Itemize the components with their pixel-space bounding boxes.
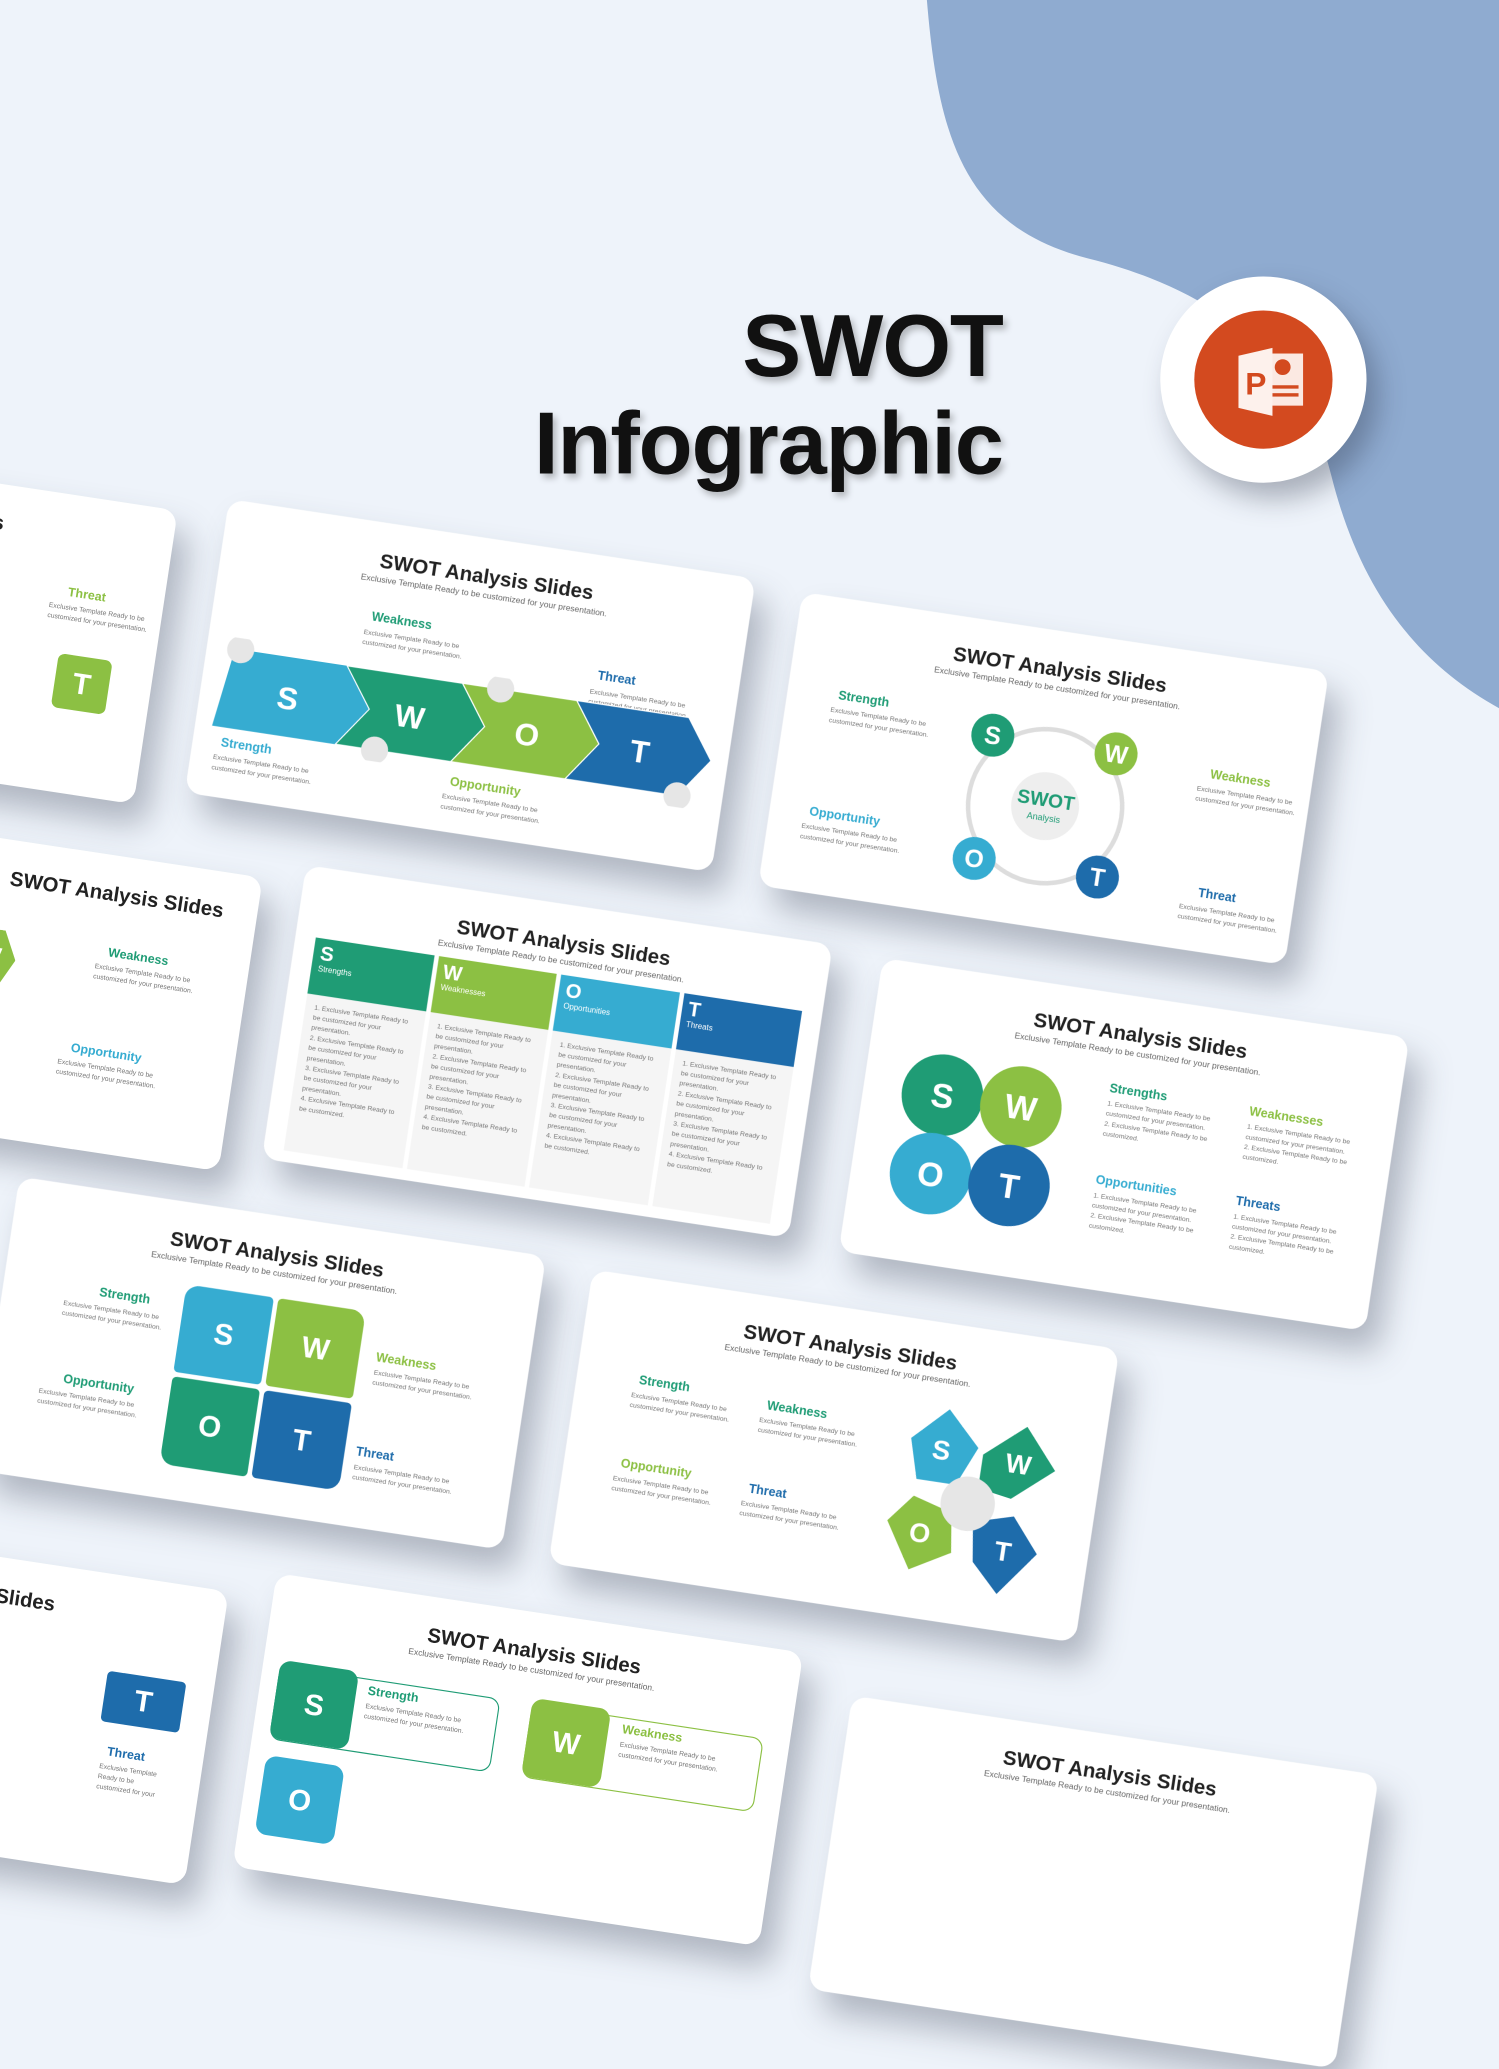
card: cycle: Threat xyxy=(1197,887,1237,906)
chevron row: S xyxy=(274,679,301,718)
card: chevrons: Strength xyxy=(220,736,273,757)
card: circles: T xyxy=(996,1167,1022,1207)
card: diamonds: O xyxy=(907,1516,933,1550)
card: table: 1. Exclusive Template Ready to be customized for your presentation. xyxy=(679,1061,777,1093)
card: chevrons: Exclusive Template Ready to be customized for your presentation. xyxy=(362,629,462,661)
card: table: 1. Exclusive Template Ready to be customized for your presentation. xyxy=(433,1023,531,1056)
card: cycle: Analysis xyxy=(1026,810,1061,825)
card: diamonds: Exclusive Template Ready to be customized for your presentation. xyxy=(739,1500,839,1532)
card: circles: Strengths xyxy=(1109,1082,1168,1104)
card: squares: O xyxy=(196,1407,224,1444)
card: diamonds: W xyxy=(1003,1447,1034,1481)
card: circles: 2. Exclusive Template Ready to be customized. xyxy=(1088,1213,1194,1235)
card: cycle xyxy=(758,592,1329,965)
card: left partial middle: Exclusive Template Ready to be customized for your presentation. xyxy=(55,1059,156,1091)
card: bottom middle xyxy=(232,1573,803,1946)
card: diamonds xyxy=(548,1269,1119,1643)
card: diamonds: Exclusive Template Ready to be customized for your presentation. xyxy=(611,1475,711,1507)
card: squares: Exclusive Template Ready to be customized for your presentation. xyxy=(372,1370,472,1402)
card: squares: Threat xyxy=(355,1445,395,1464)
card: diamonds: S xyxy=(930,1433,953,1467)
card: table: 3. Exclusive Template Ready to be customized for your presentation. xyxy=(547,1103,645,1135)
card: cycle: Exclusive Template Ready to be customized for your presentation. xyxy=(1195,786,1295,817)
card: table: Strengths xyxy=(317,965,352,978)
card: diamonds: Exclusive Template Ready to be customized for your presentation. xyxy=(724,1342,971,1389)
card: chevrons: Threat xyxy=(597,669,636,689)
card: table: 3. Exclusive Template Ready to be customized for your presentation. xyxy=(670,1121,767,1154)
card: left partial top xyxy=(0,431,178,804)
card: bottom middle: Exclusive Template Ready to be customized for your presentation. xyxy=(618,1742,718,1774)
card: table: 1. Exclusive Template Ready to be customized for your presentation. xyxy=(556,1042,654,1075)
card: squares: Exclusive Template Ready to be customized for your presentation. xyxy=(352,1464,452,1496)
card: circles: SWOT Analysis Slides xyxy=(1032,1008,1249,1063)
card: squares: Exclusive Template Ready to be customized for your presentation. xyxy=(61,1300,162,1332)
chevron row: O xyxy=(512,715,542,754)
card: squares: SWOT Analysis Slides xyxy=(169,1227,385,1282)
card: cycle: SWOT xyxy=(1016,786,1076,815)
card: left partial middle: Opportunity xyxy=(70,1041,142,1065)
card: bottom middle: Strength xyxy=(367,1684,419,1706)
card: squares: Strength xyxy=(98,1286,151,1307)
card: diamonds: T xyxy=(992,1534,1014,1568)
card: table: S xyxy=(319,942,336,966)
card: chevrons: Exclusive Template Ready to be customized for your presentation. xyxy=(440,794,540,825)
title xyxy=(534,296,1331,500)
card: table: 2. Exclusive Template Ready to be customized for your presentation. xyxy=(674,1091,772,1124)
card: table xyxy=(262,865,833,1238)
card: table: 3. Exclusive Template Ready to be customized for your presentation. xyxy=(424,1084,522,1117)
card: table: 2. Exclusive Template Ready to be customized for your presentation. xyxy=(429,1054,527,1086)
card: table: Opportunities xyxy=(563,1002,611,1017)
card: table: Weaknesses xyxy=(440,984,486,999)
card: bottom left partial: Exclusive Template Ready to be customized for your xyxy=(96,1763,157,1799)
card: cycle: T xyxy=(1088,863,1107,893)
card: table: Exclusive Template Ready to be customized for your presentation. xyxy=(437,938,685,985)
card: bottom middle: SWOT Analysis Slides xyxy=(426,1624,643,1678)
card: left partial top: Exclusive Template Ready to be customized for your presentation. xyxy=(47,602,147,634)
card: diamonds: Exclusive Template Ready to be customized for your presentation. xyxy=(757,1417,857,1449)
card: table: 2. Exclusive Template Ready to be customized for your presentation. xyxy=(306,1035,404,1068)
card: left partial middle: Exclusive Template Ready to be customized for your presentation. xyxy=(93,964,193,995)
title: Infographic xyxy=(534,393,1003,493)
card: table: 3. Exclusive Template Ready to be customized for your presentation. xyxy=(302,1065,399,1098)
card: circles: 1. Exclusive Template Ready to be customized for your presentation. xyxy=(1105,1101,1211,1133)
card: bottom middle: S xyxy=(302,1686,326,1723)
card: bottom middle: Weakness xyxy=(621,1723,683,1745)
card: left partial middle: Weakness xyxy=(107,946,169,969)
card: left partial middle: SWOT Analysis Slides xyxy=(8,867,225,922)
card: bottom middle: O xyxy=(286,1781,314,1818)
card: circles: S xyxy=(928,1076,956,1117)
card: chevrons: Exclusive Template Ready to be customized for your presentation. xyxy=(588,689,688,721)
card: table: Threats xyxy=(685,1021,713,1033)
card: squares: Weakness xyxy=(375,1351,437,1373)
card: squares: Opportunity xyxy=(62,1372,135,1397)
card: table: 4. Exclusive Template Ready to be customized. xyxy=(544,1133,640,1156)
card: squares: Exclusive Template Ready to be customized for your presentation. xyxy=(150,1249,398,1297)
chevron row: W xyxy=(392,697,427,737)
card: diamonds: Exclusive Template Ready to be customized for your presentation. xyxy=(629,1392,729,1424)
card: circles: Weaknesses xyxy=(1248,1105,1324,1130)
card: table: T xyxy=(687,997,702,1022)
icon: powerpoint xyxy=(1160,276,1367,483)
card: cycle: Exclusive Template Ready to be customized for your presentation. xyxy=(933,665,1181,712)
card: table: 4. Exclusive Template Ready to be customized. xyxy=(421,1114,517,1138)
card: cycle: Opportunity xyxy=(808,805,881,829)
icon: powerpoint: P xyxy=(1245,365,1266,401)
card: circles: Exclusive Template Ready to be customized for your presentation. xyxy=(1014,1031,1261,1078)
card: chevrons: SWOT Analysis Slides xyxy=(378,550,595,604)
card: circles: 1. Exclusive Template Ready to be customized for your presentation. xyxy=(1091,1193,1197,1224)
title: SWOT xyxy=(742,296,1003,395)
card: bottom right: Exclusive Template Ready to be customized for your presentation. xyxy=(983,1768,1231,1816)
card: chevrons: Exclusive Template Ready to be customized for your presentation. xyxy=(360,572,608,619)
card: cycle: Exclusive Template Ready to be customized for your presentation. xyxy=(1177,903,1277,935)
card: circles xyxy=(839,958,1410,1331)
card: squares xyxy=(0,1177,546,1550)
card: cycle: O xyxy=(962,844,986,875)
card: circles: 1. Exclusive Template Ready to be customized for your presentation. xyxy=(1231,1214,1337,1246)
card: table: SWOT Analysis Slides xyxy=(455,916,672,970)
card: table: 1. Exclusive Template Ready to be customized for your presentation. xyxy=(311,1005,408,1038)
card: chevrons: Weakness xyxy=(371,610,433,633)
card: circles: Opportunities xyxy=(1095,1174,1178,1199)
card: diamonds: SWOT Analysis Slides xyxy=(742,1320,959,1375)
card: bottom left partial xyxy=(0,1512,229,1885)
card: left partial middle xyxy=(0,798,263,1171)
card: squares: T xyxy=(290,1422,313,1458)
card: diamonds: Opportunity xyxy=(620,1457,692,1481)
card: bottom middle: Exclusive Template Ready to be customized for your presentation. xyxy=(363,1703,464,1735)
card: cycle: Exclusive Template Ready to be customized for your presentation. xyxy=(828,707,929,739)
card: cycle: SWOT Analysis Slides xyxy=(952,642,1168,697)
card: left partial top: Threat xyxy=(67,586,107,605)
card: chevrons: Exclusive Template Ready to be customized for your presentation. xyxy=(211,754,311,786)
card: circles: 2. Exclusive Template Ready to be customized. xyxy=(1242,1144,1347,1167)
card: squares: Exclusive Template Ready to be customized for your presentation. xyxy=(37,1388,137,1420)
card: table: 2. Exclusive Template Ready to be customized for your presentation. xyxy=(552,1072,649,1105)
card: table: O xyxy=(564,979,583,1004)
card: table: 4. Exclusive Template Ready to be customized. xyxy=(299,1096,395,1119)
card: bottom left partial: T xyxy=(132,1683,155,1719)
card: cycle: W xyxy=(1102,739,1130,771)
card: diamonds: Threat xyxy=(748,1482,787,1501)
card: circles: 1. Exclusive Template Ready to be customized for your presentation. xyxy=(1245,1124,1350,1156)
card: circles: 2. Exclusive Template Ready to be customized. xyxy=(1228,1234,1334,1256)
card: squares: W xyxy=(299,1329,332,1367)
card: cycle: S xyxy=(982,721,1003,751)
card: circles: Threats xyxy=(1235,1195,1281,1215)
card: squares: S xyxy=(211,1316,236,1352)
card: diamonds: Weakness xyxy=(766,1399,828,1422)
chevron row xyxy=(212,637,710,808)
card: bottom right: SWOT Analysis Slides xyxy=(1002,1746,1218,1801)
card: diamonds: Strength xyxy=(638,1374,691,1395)
card: table: W xyxy=(441,960,464,986)
card: circles: W xyxy=(1002,1087,1040,1130)
chevron row: T xyxy=(627,732,653,771)
card: left partial top: T xyxy=(70,665,93,702)
card: cycle: Exclusive Template Ready to be customized for your presentation. xyxy=(799,823,900,855)
card: chevrons: Opportunity xyxy=(449,775,521,800)
card: bottom middle: Exclusive Template Ready to be customized for your presentation. xyxy=(408,1646,655,1693)
card: chevrons xyxy=(185,499,756,872)
card: bottom right xyxy=(808,1695,1379,2069)
card: cycle: Weakness xyxy=(1209,768,1271,791)
card: circles: 2. Exclusive Template Ready to be customized. xyxy=(1102,1121,1208,1143)
card: bottom middle: W xyxy=(550,1724,583,1761)
card: bottom left partial: Threat xyxy=(106,1745,146,1764)
card: table: 4. Exclusive Template Ready to be customized. xyxy=(667,1151,763,1175)
card: circles: O xyxy=(914,1154,946,1196)
card: cycle: Strength xyxy=(837,689,890,710)
